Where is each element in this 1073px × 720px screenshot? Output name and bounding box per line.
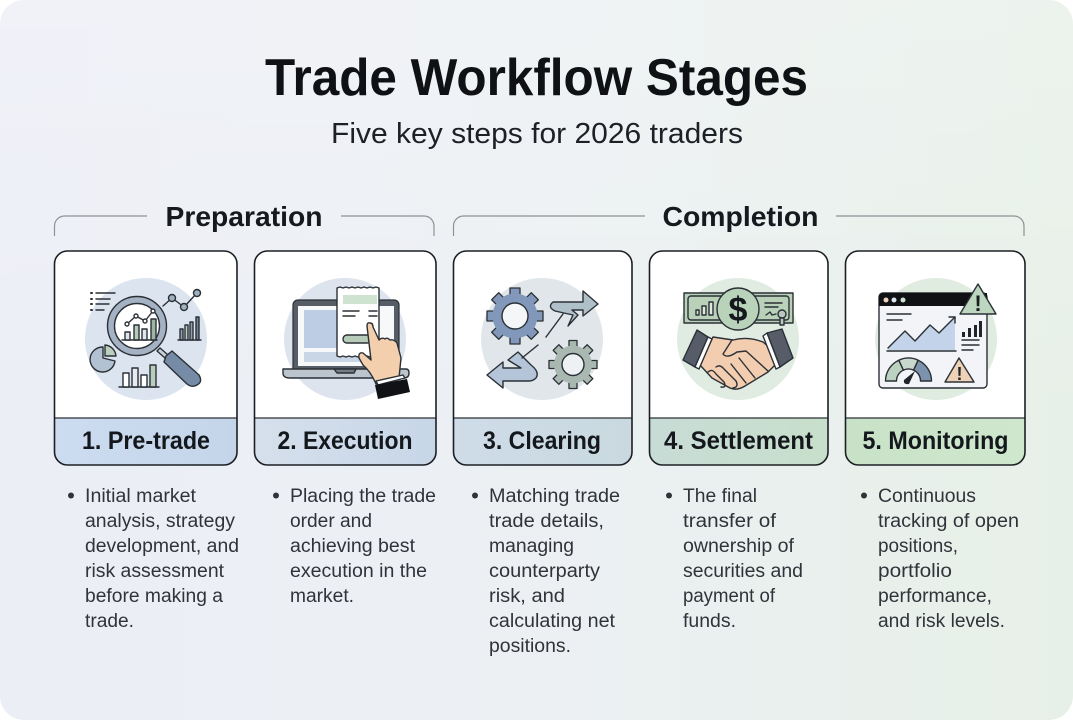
description: Pre-trade: development, and [85,536,239,557]
arrow right [550,291,598,326]
description: Settlement [666,486,803,632]
title: Trade Workflow Stages [265,49,808,107]
right cuff [763,329,793,369]
left cuff [683,330,712,369]
description: Execution: execution in the [290,561,427,582]
description: Monitoring [861,486,1019,632]
group bracket: Preparation [54,201,434,236]
description: Settlement: The final [683,486,757,507]
description: Settlement: securities and [683,561,803,582]
description: Settlement: funds. [683,611,736,632]
icon: magnifying glass analysis [85,278,207,400]
subtitle: Five key steps for 2026 traders [331,118,743,150]
card 2: Execution [254,251,436,465]
description: Monitoring: performance, [878,586,992,607]
small gear [549,340,597,388]
arrow left [487,352,537,388]
description: Monitoring: Continuous [878,486,976,507]
gauge [886,358,932,384]
description: Settlement: ownership of [683,536,795,557]
group bracket: Completion: Completion [662,201,818,232]
description: Execution: Placing the trade [290,486,436,507]
description: Monitoring: and risk levels. [878,611,1005,632]
icon: handshake and money [677,278,799,400]
description: Pre-trade: Initial market [85,486,197,507]
card 1: Pre-trade [54,251,237,465]
dollar sign: $ [729,291,748,329]
description: Pre-trade [68,486,239,632]
icon: gears and arrows [481,278,603,400]
label: 2. Execution [278,427,412,455]
label: 1. Pre-trade [82,427,210,455]
icon: laptop with order ticket and hand [283,278,410,400]
description: Clearing: managing [489,536,574,557]
icon: monitoring dashboard [875,278,997,400]
description: Execution: achieving best [290,536,416,557]
description: Monitoring: positions, [878,536,958,557]
description: Execution [273,486,436,607]
description: Pre-trade: risk assessment [85,561,225,582]
description: Clearing: calculating net [489,611,616,632]
description: Pre-trade: analysis, strategy [85,511,235,532]
description: Settlement: transfer of [683,511,777,532]
description: Monitoring: tracking of open [878,511,1019,532]
label: 3. Clearing [483,427,601,455]
description: Clearing: positions. [489,636,571,657]
handshake [700,337,782,389]
card 3: Clearing [454,251,632,465]
description: Clearing [472,486,620,657]
card 5: Monitoring [846,251,1025,465]
large gear [487,288,543,344]
description: Settlement: payment of [683,586,776,607]
description: Monitoring: portfolio [878,561,952,582]
group bracket: Completion [454,201,1024,236]
description: Execution: order and [290,511,372,532]
description: Clearing: Matching trade [489,486,620,507]
label: 5. Monitoring [862,427,1008,455]
icon: monitoring dashboard: ! [974,291,982,316]
description: Clearing: trade details, [489,511,604,532]
icon: monitoring dashboard: ! [956,364,962,384]
description: Pre-trade: before making a [85,586,223,607]
description: Pre-trade: trade. [85,611,134,632]
description: Execution: market. [290,586,354,607]
arrow left tail [522,345,538,358]
card 4: Settlement [650,251,828,465]
description: Clearing: risk, and [489,586,565,607]
arrow right tail [546,314,563,337]
description: Clearing: counterparty [489,561,601,582]
group bracket: Preparation: Preparation [166,201,322,232]
label: 4. Settlement [664,427,814,455]
